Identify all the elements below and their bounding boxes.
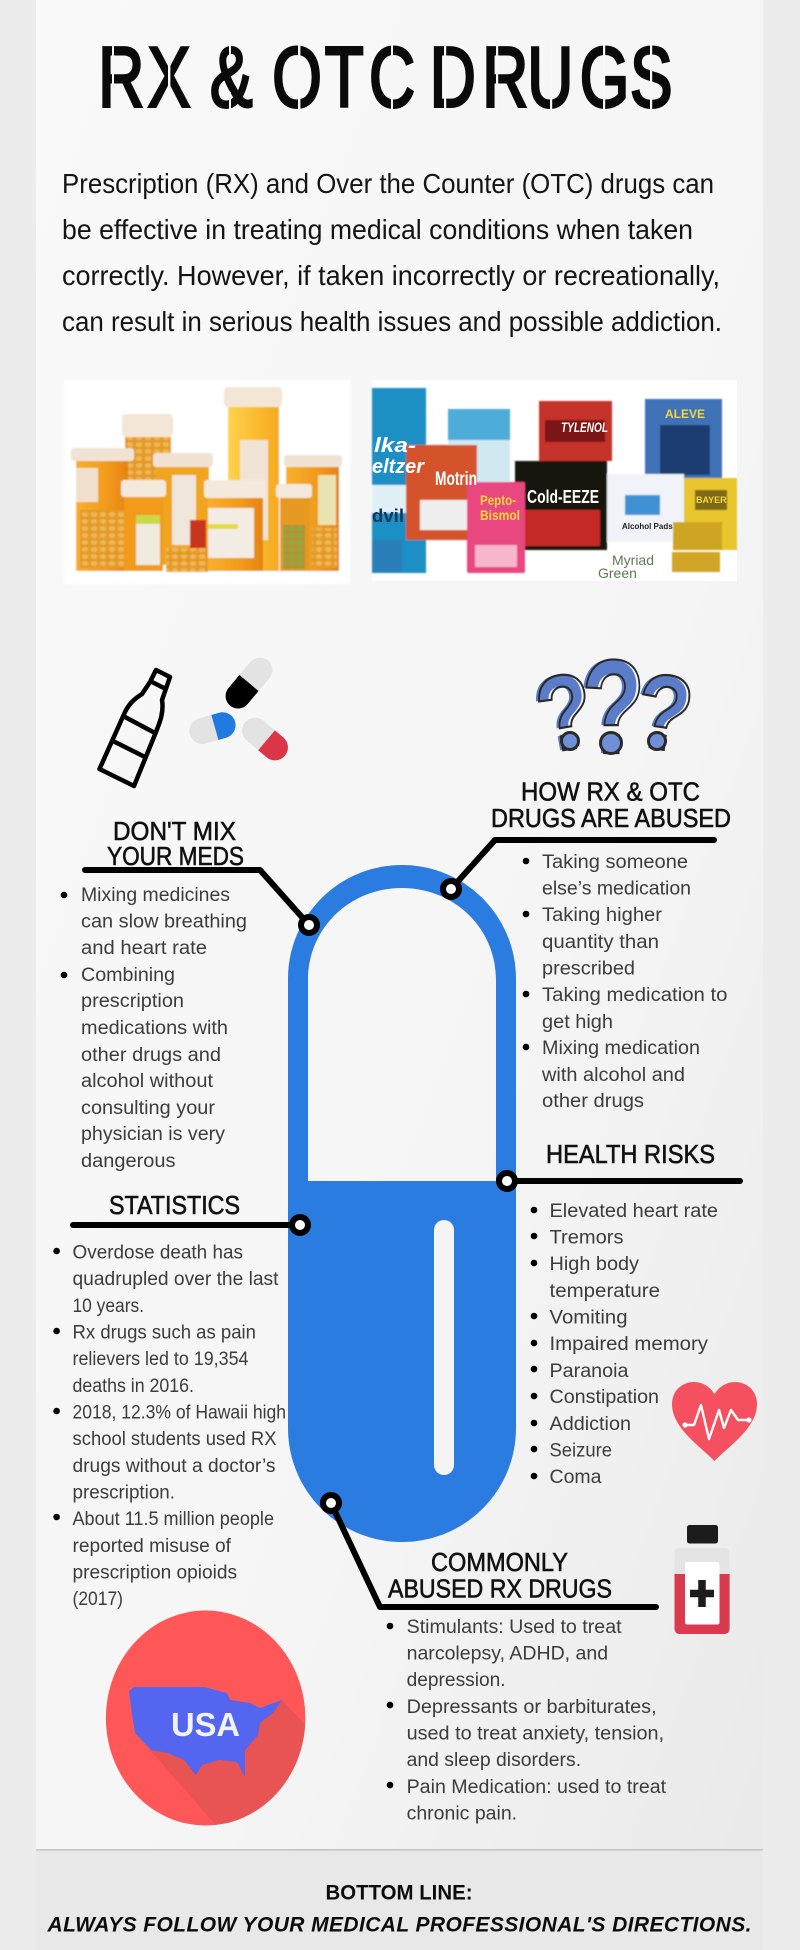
callout: how drugs are abused: else’s medication (542, 879, 691, 900)
photo: over-the-counter medicine boxes: Pepto- (480, 492, 516, 508)
callout: don't mix your meds: medications with (81, 1018, 228, 1039)
callout: health risks: temperature (550, 1281, 660, 1302)
callout: commonly abused rx drugs: used to treat anxiety, tension, (407, 1724, 664, 1744)
panel: bottom line band (36, 1849, 763, 1950)
callout: statistics: About 11.5 million people (72, 1509, 274, 1530)
callout: don't mix your meds: dangerous (81, 1151, 176, 1172)
callout: statistics: (2017) (72, 1589, 123, 1610)
callout: don't mix your meds: consulting your (81, 1098, 216, 1119)
callout: how drugs are abused: quantity than (542, 932, 659, 953)
photo: over-the-counter medicine boxes: Motrin (435, 469, 477, 490)
callout: health risks: Tremors (550, 1228, 624, 1249)
callout: commonly abused rx drugs: Depressants or barbiturates, (407, 1697, 657, 1718)
icon: question marks: ? (626, 650, 697, 777)
title: RX & OTC DRUGS (98, 30, 673, 125)
callout: don't mix your meds: YOUR MEDS (107, 841, 244, 871)
icon: question marks: ? (524, 649, 600, 777)
photo: over-the-counter medicine boxes: Alcohol Pads (622, 522, 673, 531)
icon: question marks (524, 633, 700, 782)
icon: question marks: ? (629, 650, 700, 777)
callout: health risks: Coma (550, 1467, 602, 1488)
bottom line message: ALWAYS FOLLOW YOUR MEDICAL PROFESSIONAL'S DIRECTIONS. (46, 1914, 752, 1936)
photo: over-the-counter medicine boxes: eltzer (372, 456, 425, 478)
callout: statistics: relievers led to 19,354 (72, 1349, 249, 1370)
callout: how drugs are abused: prescribed (542, 958, 635, 980)
callout: commonly abused rx drugs: ABUSED RX DRUGS (388, 1574, 612, 1604)
callout: how drugs are abused: with alcohol and (541, 1065, 685, 1086)
callout: don't mix your meds: prescription (81, 991, 184, 1012)
capsule highlight (434, 1220, 454, 1475)
callout: statistics: reported misuse of (72, 1536, 232, 1557)
callout: health risks: HEALTH RISKS (546, 1139, 715, 1169)
callout: health risks: Paranoia (550, 1361, 629, 1382)
callout: don't mix your meds: Combining (81, 965, 175, 986)
callout: health risks: Seizure (550, 1440, 612, 1462)
callout: how drugs are abused: Taking medication to (542, 985, 728, 1006)
callout: commonly abused rx drugs: COMMONLY (431, 1547, 568, 1577)
callout: statistics: prescription. (72, 1482, 175, 1504)
capsule: large blue pill (288, 865, 516, 1542)
callout: statistics: school students used RX (72, 1429, 277, 1450)
callout: health risks: Elevated heart rate (550, 1201, 718, 1222)
callout: health risks (499, 1139, 740, 1488)
photo: over-the-counter medicine boxes (372, 380, 737, 581)
photo: over-the-counter medicine boxes: Cold-EEZE (527, 487, 599, 507)
callout: don't mix your meds: physician is very (81, 1124, 226, 1145)
callout: statistics: deaths in 2016. (72, 1376, 194, 1397)
icon: red pill (237, 712, 293, 766)
callout: health risks: Vomiting (550, 1308, 628, 1328)
intro paragraph: Prescription (RX) and Over the Counter (OTC) drugs can (62, 168, 714, 199)
callout: how drugs are abused: HOW RX & OTC (521, 776, 700, 806)
icon: black pill (220, 652, 278, 714)
photo: over-the-counter medicine boxes: lka- (374, 435, 416, 457)
callout: statistics: drugs without a doctor’s (72, 1456, 276, 1477)
callout: statistics: 10 years. (72, 1296, 144, 1317)
callout: how drugs are abused: DRUGS ARE ABUSED (491, 803, 731, 833)
intro paragraph: be effective in treating medical conditions when taken (62, 214, 693, 245)
photo: prescription pill bottles (64, 380, 350, 584)
icon: question marks: ? (579, 633, 642, 782)
icon: heart with ECG line (672, 1382, 757, 1461)
callout: health risks: Impaired memory (550, 1334, 709, 1355)
callout: don't mix your meds: alcohol without (81, 1071, 214, 1092)
intro paragraph: correctly. However, if taken incorrectly or recreationally, (62, 260, 720, 291)
photo: over-the-counter medicine boxes: Bismol (480, 507, 520, 523)
icon: question marks: ? (582, 633, 645, 782)
bottom line heading: BOTTOM LINE: (326, 1882, 472, 1904)
callout: how drugs are abused: Taking higher (542, 905, 663, 926)
callout: commonly abused rx drugs (323, 1495, 667, 1824)
callout: commonly abused rx drugs: Pain Medication: used to treat (407, 1777, 667, 1798)
photo: over-the-counter medicine boxes: dvil (372, 506, 404, 526)
callout: don't mix your meds: Mixing medicines (81, 885, 230, 906)
callout: don't mix your meds: can slow breathing (81, 912, 247, 933)
callout: statistics: Rx drugs such as pain (72, 1322, 256, 1344)
callout: commonly abused rx drugs: depression. (407, 1670, 506, 1691)
photo: over-the-counter medicine boxes: TYLENOL (561, 419, 608, 435)
callout: how drugs are abused: get high (542, 1012, 613, 1033)
callout: how drugs are abused: Taking someone (542, 852, 688, 873)
photo: over-the-counter medicine boxes: BAYER (696, 495, 727, 505)
callout: commonly abused rx drugs: narcolepsy, ADHD, and (407, 1644, 608, 1665)
photo: over-the-counter medicine boxes: Green (598, 565, 637, 581)
icon: blue pill (186, 709, 239, 747)
callout: statistics: quadrupled over the last (72, 1269, 279, 1290)
photo: over-the-counter medicine boxes: ALEVE (665, 407, 705, 421)
callout: health risks: Constipation (550, 1387, 659, 1408)
icon: USA map badge (106, 1610, 310, 1830)
callout: commonly abused rx drugs: Stimulants: Used to treat (407, 1617, 622, 1638)
callout: don't mix your meds (61, 816, 317, 1172)
callout: how drugs are abused: other drugs (542, 1091, 644, 1112)
intro paragraph: can result in serious health issues and possible addiction. (62, 306, 722, 337)
photo: over-the-counter medicine boxes: Myriad (612, 552, 654, 568)
callout: statistics (53, 1190, 308, 1610)
icon: wine bottle (100, 670, 170, 786)
callout: how drugs are abused (443, 776, 731, 1112)
callout: commonly abused rx drugs: and sleep disorders. (407, 1750, 581, 1771)
callout: health risks: Addiction (550, 1414, 631, 1435)
callout: don't mix your meds: DON'T MIX (113, 816, 236, 846)
icon: medicine bottle (674, 1525, 730, 1634)
callout: statistics: prescription opioids (72, 1562, 237, 1584)
callout: statistics: Overdose death has (72, 1243, 243, 1264)
callout: how drugs are abused: Mixing medication (542, 1038, 700, 1059)
intro paragraph (62, 168, 722, 337)
callout: don't mix your meds: other drugs and (81, 1045, 221, 1066)
callout: statistics: STATISTICS (109, 1190, 240, 1220)
callout: commonly abused rx drugs: chronic pain. (407, 1804, 517, 1824)
callout: statistics: 2018, 12.3% of Hawaii high (72, 1402, 286, 1424)
icon: question marks: ? (527, 649, 603, 777)
callout: health risks: High body (550, 1254, 640, 1275)
icon: USA map badge: USA (171, 1706, 240, 1743)
callout: don't mix your meds: and heart rate (81, 938, 207, 959)
